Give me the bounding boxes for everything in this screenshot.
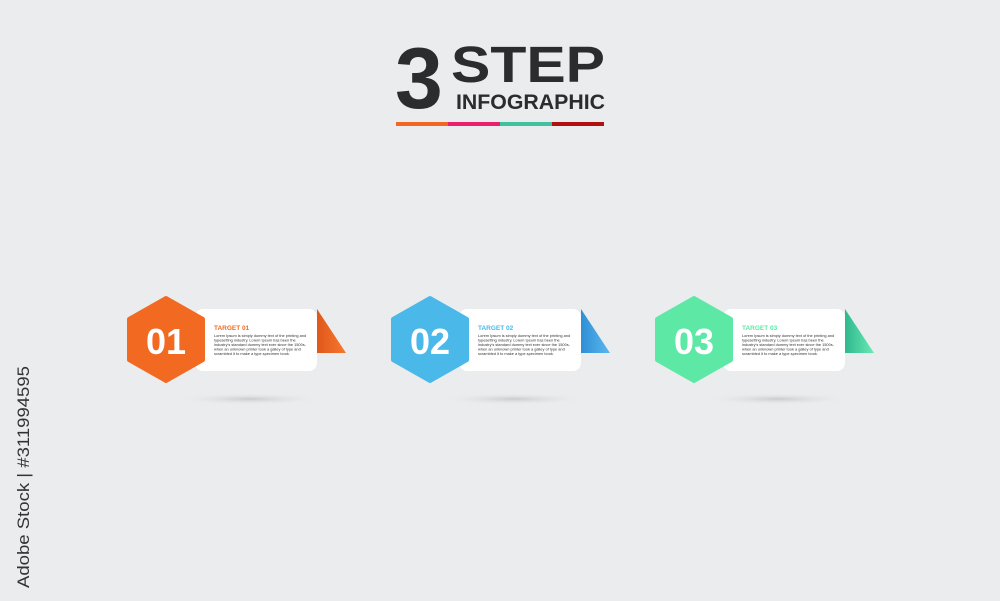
watermark id: Adobe Stock | #311994595 [14, 366, 33, 588]
step 02: industry's standard dummy text ever since the 1500s, [478, 342, 570, 347]
step 03: industry's standard dummy text ever since the 1500s, [742, 342, 834, 347]
step 02: when an unknown printer took a galley of type and [478, 346, 565, 352]
step 03: scrambled it to make a type specimen book. [742, 351, 818, 356]
step 01: Lorem Ipsum is simply dummy text of the printing and [214, 333, 306, 338]
step 03: typesetting industry. Lorem Ipsum has been the [742, 338, 824, 342]
title [395, 31, 605, 127]
step 03 [657, 298, 874, 405]
color bar [396, 122, 604, 126]
step 03: when an unknown printer took a galley of type and [742, 346, 829, 352]
title: STEP [451, 36, 605, 93]
step 01: TARGET 01 [214, 325, 250, 332]
step 01: 01 [146, 321, 186, 362]
title: 3 [395, 31, 443, 127]
step 02: scrambled it to make a type specimen book. [478, 351, 554, 356]
step 01: scrambled it to make a type specimen book. [214, 351, 290, 356]
step 02: 02 [410, 321, 450, 362]
step 02: typesetting industry. Lorem Ipsum has been the [478, 338, 560, 342]
step 01: typesetting industry. Lorem Ipsum has been the [214, 338, 296, 342]
step 01: industry's standard dummy text ever since the 1500s, [214, 342, 306, 347]
step 02: TARGET 02 [478, 325, 514, 332]
step 02 [393, 298, 610, 405]
step 01: when an unknown printer took a galley of type and [214, 346, 301, 352]
step 03: 03 [674, 321, 714, 362]
step 03: Lorem Ipsum is simply dummy text of the printing and [742, 333, 834, 338]
step 02: Lorem Ipsum is simply dummy text of the printing and [478, 333, 570, 338]
step 03: TARGET 03 [742, 325, 778, 332]
title: INFOGRAPHIC [456, 91, 605, 114]
step 01 [129, 298, 346, 405]
